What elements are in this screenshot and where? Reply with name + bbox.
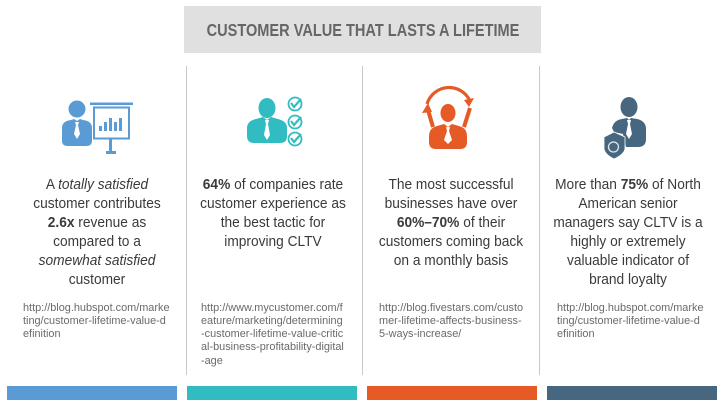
source: stat one: efinition	[23, 328, 61, 340]
text: stat one: customer	[69, 271, 125, 288]
text: stat three: customers coming back	[379, 233, 523, 250]
footer bar: blue	[7, 386, 177, 400]
text: stat three: on a monthly basis	[394, 252, 508, 269]
source: stat one: ting/customer-lifetime-value-d	[23, 315, 166, 327]
text: stat four: brand loyalty	[589, 271, 667, 288]
source: stat two: -age	[201, 355, 223, 367]
text: stat two: improving CLTV	[224, 233, 322, 250]
title banner	[184, 6, 541, 53]
text: stat four: American senior	[578, 195, 678, 212]
text: stat four	[553, 176, 703, 288]
source: stat one	[23, 302, 170, 340]
text: stat four: managers say CLTV is a	[553, 214, 703, 231]
source: stat two: -customer-lifetime-value-critic	[201, 328, 343, 340]
text: stat two: the best tactic for	[221, 214, 325, 231]
source: stat four: http://blog.hubspot.com/marke	[557, 302, 704, 314]
source: stat two: eature/marketing/determining	[201, 315, 343, 327]
text: stat one: customer contributes	[33, 195, 161, 212]
text: stat three: 60%–70% of their	[397, 214, 505, 231]
source: stat three: http://blog.fivestars.com/custo	[379, 302, 523, 314]
text: stat three: businesses have over	[385, 195, 517, 212]
footer bar: slate	[547, 386, 717, 400]
text: stat four: More than 75% of North	[555, 176, 701, 193]
footer bar: orange	[367, 386, 537, 400]
source: stat four	[557, 302, 704, 340]
text: stat three	[379, 176, 524, 269]
text: stat one: 2.6x revenue as	[48, 214, 146, 231]
text: stat two: 64% of companies rate	[203, 176, 343, 193]
text: stat one: A totally satisfied	[46, 176, 148, 193]
source: stat one: http://blog.hubspot.com/marke	[23, 302, 170, 314]
source: stat four: efinition	[557, 328, 595, 340]
text: stat one: compared to a	[53, 233, 141, 250]
title banner: CUSTOMER VALUE THAT LASTS A LIFETIME	[207, 20, 519, 40]
footer bar: teal	[187, 386, 357, 400]
text: stat four: valuable indicator of	[567, 252, 689, 269]
text: stat four: highly or extremely	[570, 233, 686, 250]
source: stat two: al-business-profitability-digital	[201, 341, 344, 353]
source: stat three: 5-ways-increase/	[379, 328, 461, 340]
source: stat two: http://www.mycustomer.com/f	[201, 302, 343, 314]
text: stat one: somewhat satisfied	[39, 252, 155, 269]
source: stat three: mer-lifetime-affects-business-	[379, 315, 522, 327]
text: stat one	[33, 176, 161, 288]
source: stat three	[379, 302, 523, 340]
text: stat three: The most successful	[388, 176, 514, 193]
source: stat two	[201, 302, 344, 367]
text: stat two: customer experience as	[200, 195, 346, 212]
source: stat four: ting/customer-lifetime-value-d	[557, 315, 700, 327]
text: stat two	[200, 176, 346, 250]
